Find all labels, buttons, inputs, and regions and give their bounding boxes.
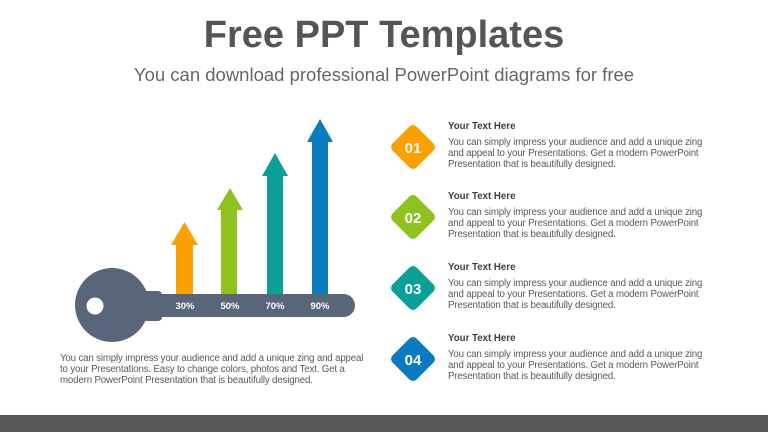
arrow 70% <box>262 153 288 294</box>
title: Free PPT Templates <box>204 14 564 56</box>
diamonds: 01 <box>405 140 421 157</box>
labels: 90% <box>310 301 330 312</box>
labels: 30% <box>175 301 195 312</box>
subtitle: You can download professional PowerPoint diagrams for free <box>134 64 634 85</box>
left paragraph: You can simply impress your audience and add a unique zing and appeal to your Presentations. Easy to change colors, photos and Text. Get a modern PowerPoint Presentation that is beautifully designed. <box>60 353 363 386</box>
key <box>75 268 355 342</box>
item 3 <box>448 262 702 311</box>
item 2: You can simply impress your audience and add a unique zing and appeal to your Presentations. Get a modern PowerPoint Presentation that is beautifully designed. <box>448 207 702 240</box>
diamonds: 03 <box>405 281 421 298</box>
item 1: You can simply impress your audience and add a unique zing and appeal to your Presentations. Get a modern PowerPoint Presentation that is beautifully designed. <box>448 137 702 170</box>
item 2 <box>448 191 702 240</box>
diamonds: 04 <box>405 352 422 369</box>
item 3: Your Text Here <box>448 262 515 273</box>
item 1 <box>448 121 702 170</box>
labels: 70% <box>265 301 285 312</box>
arrow 90% <box>307 119 333 294</box>
item 1: Your Text Here <box>448 121 515 132</box>
diamonds <box>389 123 437 383</box>
item 4: You can simply impress your audience and add a unique zing and appeal to your Presentations. Get a modern PowerPoint Presentation that is beautifully designed. <box>448 349 702 382</box>
item 3: You can simply impress your audience and add a unique zing and appeal to your Presentations. Get a modern PowerPoint Presentation that is beautifully designed. <box>448 278 702 311</box>
arrow 30% <box>171 222 198 294</box>
labels <box>175 301 330 312</box>
diamonds: 02 <box>405 210 421 227</box>
labels: 50% <box>220 301 240 312</box>
item 4 <box>448 333 702 382</box>
item 4: Your Text Here <box>448 333 515 344</box>
arrow 50% <box>217 188 243 294</box>
item 2: Your Text Here <box>448 191 515 202</box>
footer bar <box>0 415 768 432</box>
